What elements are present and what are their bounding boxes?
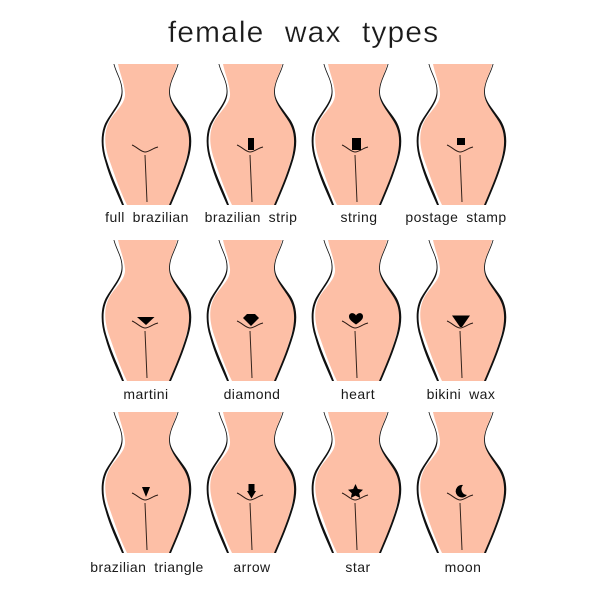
label: heart: heart [341, 386, 375, 402]
figure: heart [312, 240, 401, 402]
label: arrow: arrow [233, 559, 271, 575]
label: star: star [345, 559, 371, 575]
figure: moon [417, 412, 506, 575]
label: bikini wax: bikini wax [427, 386, 495, 402]
icon: star [348, 484, 363, 498]
figure: string [312, 64, 401, 225]
title: female wax types [168, 16, 439, 49]
label: brazilian triangle: brazilian triangle [90, 559, 204, 575]
figure: star [312, 412, 401, 575]
icon: postage stamp patch [457, 138, 465, 145]
icon: martini triangle [137, 317, 154, 325]
label: diamond: diamond [224, 386, 280, 402]
icon: string patch [352, 138, 361, 150]
label: postage stamp: postage stamp [405, 209, 507, 225]
icon: diamond [243, 314, 259, 326]
icon: strip [248, 138, 254, 150]
figure: brazilian triangle [90, 412, 204, 575]
icon: moon [456, 485, 467, 498]
label: brazilian strip: brazilian strip [205, 209, 297, 225]
icon: arrow [247, 484, 256, 498]
figure: postage stamp [405, 64, 507, 225]
icon: bikini triangle [452, 316, 470, 327]
icon: small triangle [142, 487, 150, 497]
figure: diamond [207, 240, 296, 402]
figure: full brazilian [102, 64, 191, 225]
label: martini: martini [123, 386, 169, 402]
figure: arrow [207, 412, 296, 575]
figure: bikini wax [417, 240, 506, 402]
label: moon: moon [445, 559, 481, 575]
figure: brazilian strip [205, 64, 297, 225]
label: string: string [341, 209, 377, 225]
icon: heart [349, 313, 363, 324]
label: full brazilian: full brazilian [105, 209, 189, 225]
figure: martini [102, 240, 191, 402]
